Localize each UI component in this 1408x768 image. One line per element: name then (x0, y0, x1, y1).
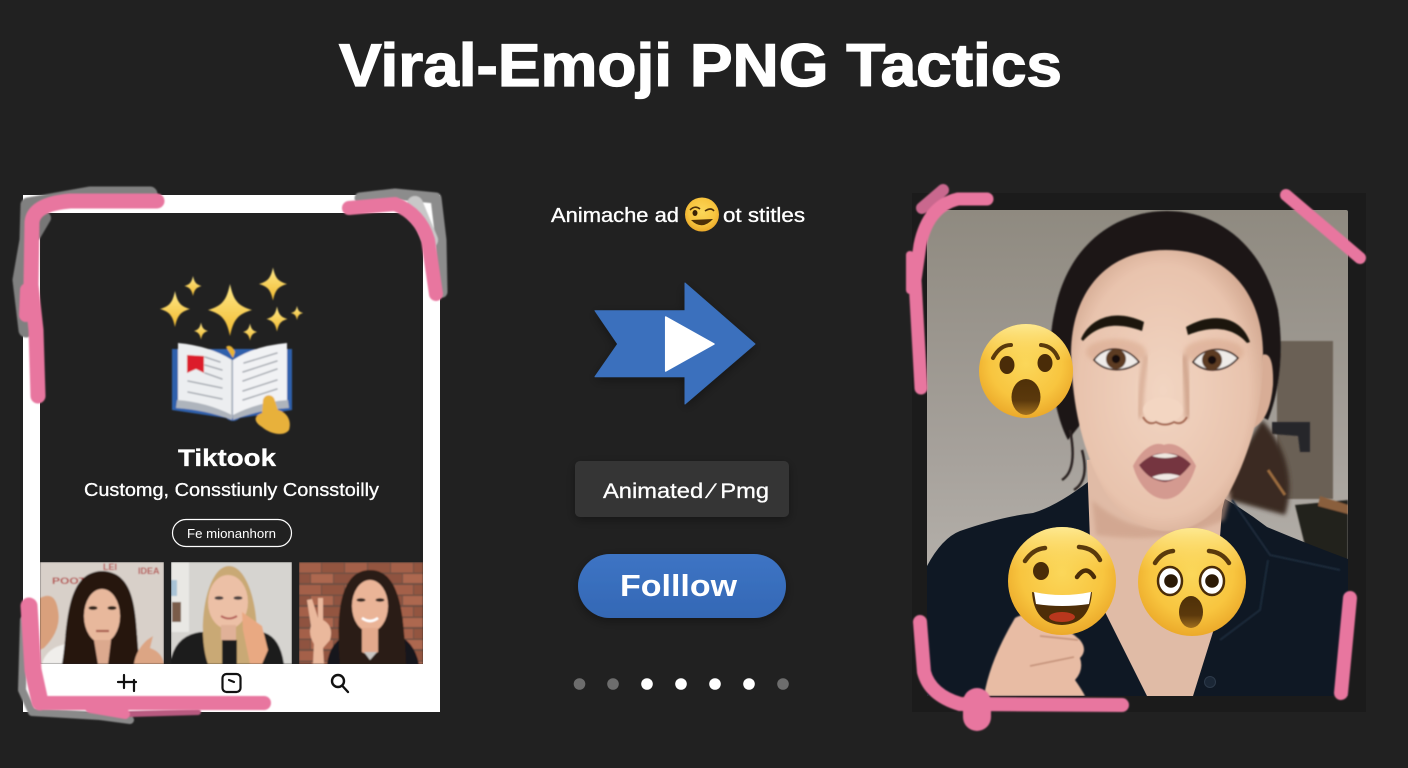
shirt (927, 475, 1348, 696)
panel: reaction photo (910, 190, 1366, 717)
icon: winking emoji small (685, 198, 719, 232)
text: caption with emoji (551, 198, 805, 232)
icon: plus tool (118, 675, 136, 691)
mouth (1133, 444, 1196, 499)
photo: thumbnail one: LEI (103, 562, 117, 572)
text: app name: Tiktook (178, 445, 277, 472)
button: outline pill: Fe mionanhorn (187, 526, 276, 541)
photo: thumbnail one: IDEA (138, 566, 160, 576)
neck shadow (1092, 490, 1232, 538)
label: animated png chip (575, 461, 789, 517)
button: outline pill (172, 520, 292, 546)
photo: thumbnail three (299, 562, 423, 664)
brush strokes: grey under-paint (20, 194, 442, 720)
eyebrows (1081, 316, 1144, 341)
button: follow (578, 554, 786, 618)
icon: magnifier (332, 675, 348, 692)
panel: phone mockup (20, 194, 442, 720)
nose (1140, 355, 1146, 418)
shelf objects (1272, 422, 1348, 566)
collar lines (1220, 500, 1340, 640)
hair (1050, 211, 1281, 440)
title: Viral-Emoji PNG Tactics (339, 32, 1062, 99)
ponytail (1225, 420, 1289, 515)
hand (984, 615, 1085, 696)
pagination dots (574, 678, 789, 690)
button: follow: Folllow (620, 568, 738, 603)
face (1071, 250, 1263, 531)
neck (1087, 460, 1225, 696)
ear (1253, 354, 1273, 428)
eyes (1094, 349, 1139, 370)
icon: sparkles (160, 268, 303, 340)
photo: thumbnail one: POOT (52, 576, 87, 586)
label: animated png chip: Animated ⁄ Pmg (603, 479, 769, 503)
photo: surprised woman (927, 210, 1348, 696)
eye shadows (1086, 339, 1146, 365)
text: tagline: Customg, Consstiunly Consstoilly (84, 479, 380, 500)
text: caption with emoji: Animache ad (551, 205, 679, 227)
icon: open book with pointing hand (172, 343, 292, 434)
icon: wide-eyed emoji (1138, 528, 1246, 636)
photo: thumbnail two (170, 562, 292, 664)
arrow: play (595, 283, 755, 404)
shirt button (1204, 676, 1216, 688)
photo frame (912, 193, 1366, 712)
wall (927, 210, 1348, 696)
phone screen (40, 213, 423, 664)
phone frame (23, 195, 440, 712)
icon: square sticker (222, 674, 240, 692)
photo: thumbnail one (40, 562, 164, 664)
brush strokes: pink corners (26, 201, 436, 714)
wall board (1277, 341, 1333, 499)
brush strokes: pink frame corners (910, 190, 1360, 717)
icon: winking laugh emoji (1008, 527, 1116, 635)
icon: shocked emoji (979, 324, 1073, 418)
text: caption with emoji: ot stitles (723, 205, 805, 227)
face features (1081, 316, 1250, 499)
